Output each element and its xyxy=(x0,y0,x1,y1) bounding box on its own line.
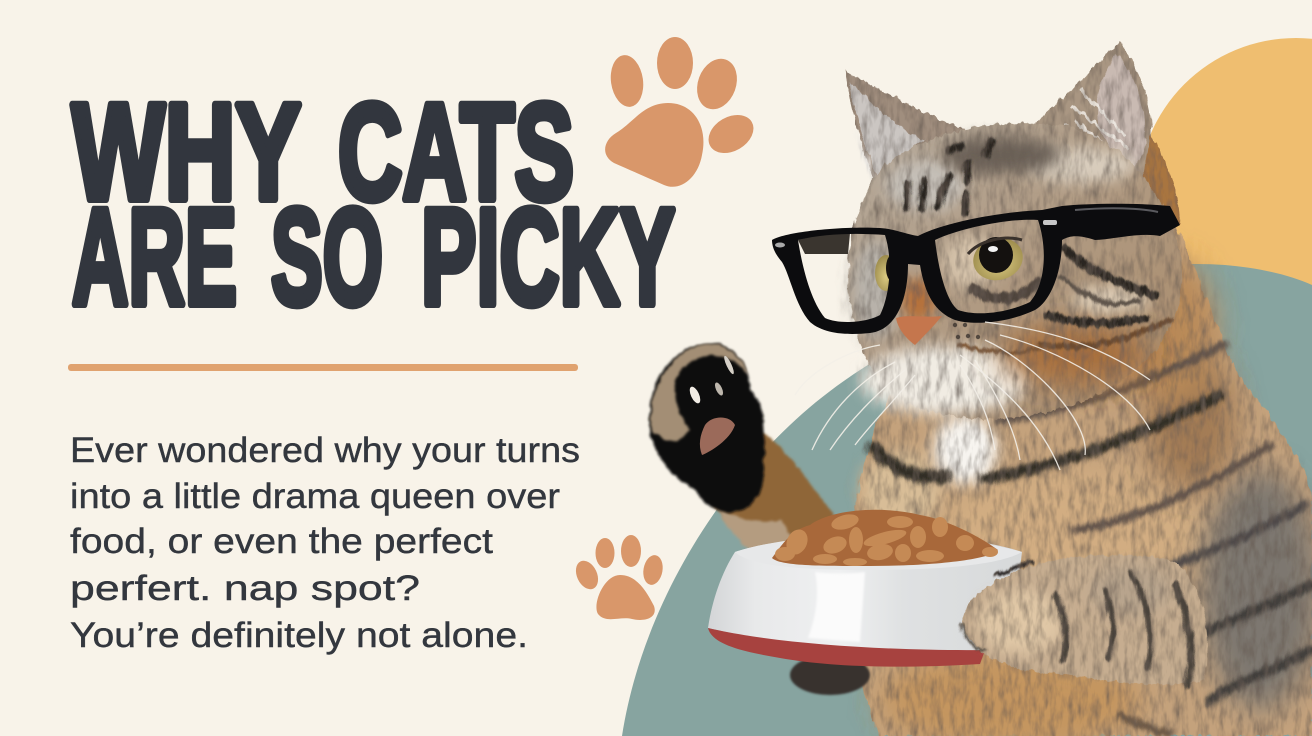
icon: large paw print xyxy=(605,37,760,187)
cat head xyxy=(848,123,1182,419)
cat right arm holding bowl xyxy=(962,555,1208,685)
cat nose xyxy=(896,316,942,345)
glasses xyxy=(772,204,1180,334)
line 4: perfert. nap spot? xyxy=(70,568,420,608)
title line 2: ARE xyxy=(72,181,237,334)
bowl outer body xyxy=(708,535,1022,652)
cat body xyxy=(850,205,1312,736)
title line 2 xyxy=(72,181,675,334)
cat eye: right xyxy=(968,232,1028,286)
teal background shape xyxy=(622,264,1312,736)
title line 1: WHY xyxy=(72,76,301,229)
title line 1: CATS xyxy=(338,76,574,229)
divider xyxy=(68,364,578,371)
cat muzzle spots xyxy=(953,323,980,339)
line 2: into a little drama queen over xyxy=(70,476,560,516)
title line 2: SO xyxy=(271,181,383,334)
line 1: Ever wondered why your turns xyxy=(70,430,580,470)
title line 2: PICKY xyxy=(421,181,675,334)
intro text xyxy=(70,430,580,655)
illustration: cat with glasses and bowl xyxy=(649,42,1312,736)
orange background circle xyxy=(1138,38,1312,354)
bowl highlight xyxy=(808,572,865,642)
cat left ear xyxy=(845,72,965,205)
cat right ear xyxy=(1025,42,1180,225)
cat raised arm and paw xyxy=(649,344,850,560)
bowl xyxy=(708,510,1022,667)
bowl inner rim xyxy=(735,536,1022,570)
food kibble xyxy=(772,510,998,566)
cat eye: left xyxy=(875,255,898,291)
line 3: food, or even the perfect xyxy=(70,521,493,561)
title xyxy=(72,76,675,334)
bowl red base xyxy=(708,628,985,667)
title line 1 xyxy=(72,76,574,229)
icon: small paw print xyxy=(572,535,665,620)
line 5: You’re definitely not alone. xyxy=(70,615,528,655)
cat lower paw under bowl xyxy=(790,655,870,695)
whiskers xyxy=(795,322,1150,470)
